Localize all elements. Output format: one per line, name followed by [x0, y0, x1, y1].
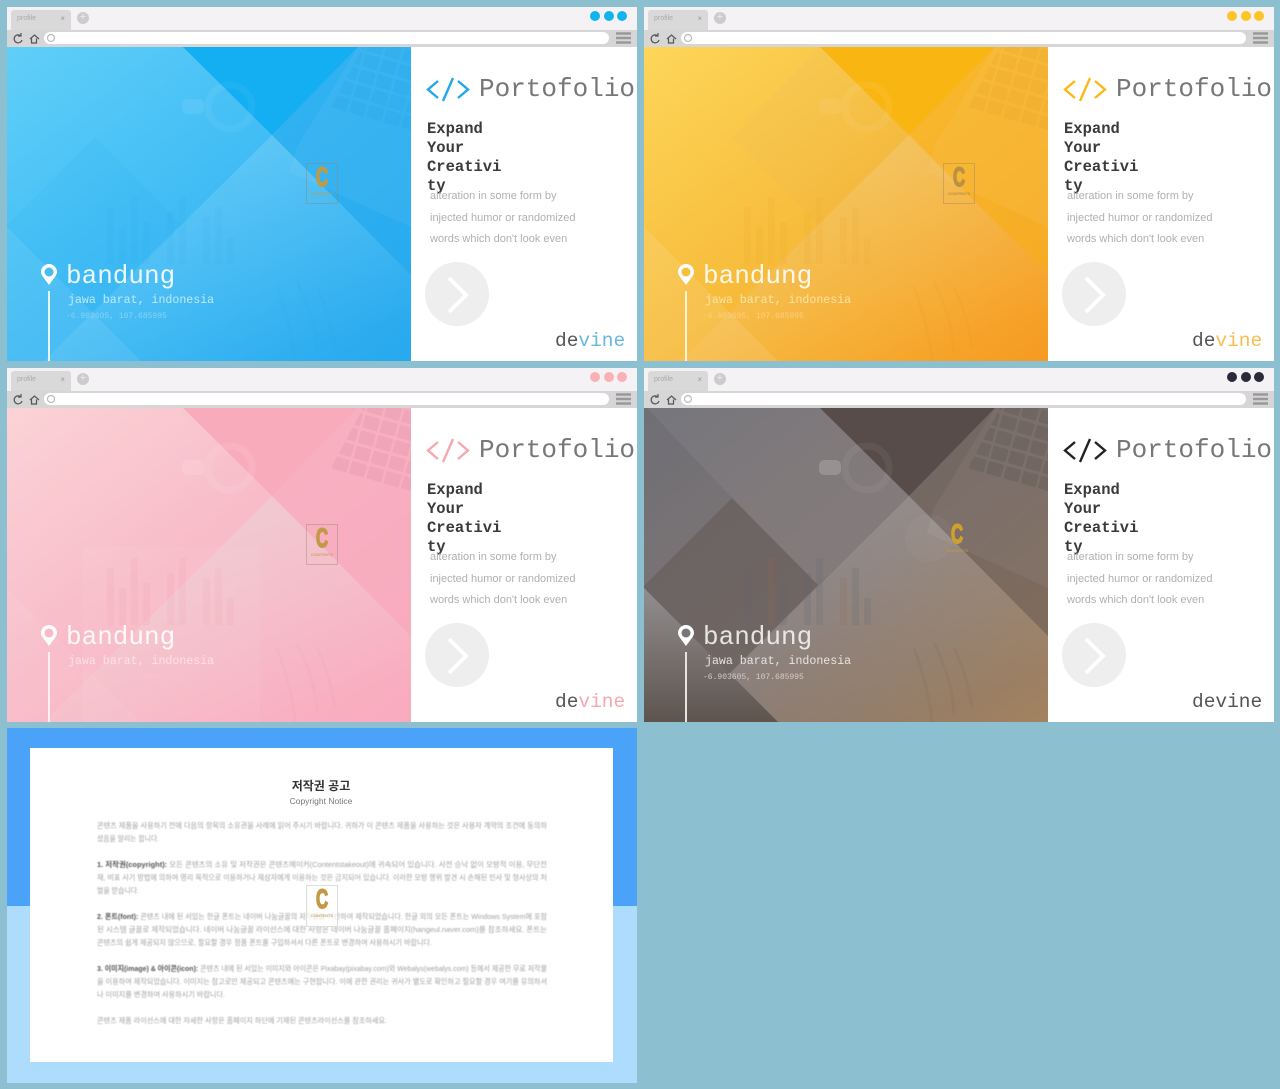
logo stamp: CONTENTS	[311, 191, 333, 196]
brand: devine: devine	[1192, 330, 1262, 352]
browser toolbar icons	[650, 32, 1268, 44]
region: jawa barat, indonesia	[68, 655, 214, 668]
subheading: Your	[1064, 500, 1101, 518]
icon: location pin	[678, 625, 694, 646]
coordinates: -6.903605, 107.685995	[66, 312, 167, 321]
brand: devine: devine	[555, 330, 625, 352]
icon: location pin	[678, 264, 694, 285]
subheading: Creativi	[1064, 158, 1138, 176]
logo stamp	[943, 163, 975, 204]
address field	[44, 393, 609, 405]
logo stamp: CONTENTS	[946, 548, 968, 553]
subheading: ty	[427, 177, 446, 195]
notice body text: 재, 비표 사기 방법에 의하여 영리 목적으로 이용하거나 제삼자에게 이용하는 것은 금지되어 있습니다. 이러한 모방 행위 발견 시 손해된 민사 및 형사상의 처	[97, 872, 547, 882]
city name: bandung	[66, 261, 175, 291]
body text	[430, 551, 576, 606]
browser tab bar: profile	[654, 15, 673, 22]
body text: words which don't look even	[1067, 233, 1204, 245]
heading: Portofolio: Portofolio	[1116, 435, 1272, 465]
browser tab bar	[644, 368, 1274, 391]
browser tab bar: ×	[60, 375, 65, 384]
region: jawa barat, indonesia	[705, 294, 851, 307]
notice body text: 셨음을 알리는 합니다.	[97, 834, 159, 843]
body text: words which don't look even	[430, 233, 567, 245]
browser toolbar icons	[14, 393, 631, 405]
notice body text: 콘텐츠 제품을 사용하기 전에 다음의 항목의 소유권을 사례에 읽어 주시기 바랍니다. 귀하가 이 콘텐츠 제품을 사용하는 것은 사용자 계약의 조건에 동의하	[97, 820, 547, 830]
logo stamp: CONTENTS	[311, 913, 333, 918]
subheading	[1064, 120, 1138, 195]
heading: Portofolio: Portofolio	[479, 435, 635, 465]
panel: yellow browser mockup	[644, 7, 1274, 361]
address field	[681, 32, 1246, 44]
city name: bandung	[66, 622, 175, 652]
heading: Portofolio: Portofolio	[479, 74, 635, 104]
city name: bandung	[703, 261, 812, 291]
location line	[685, 652, 687, 722]
subheading: Creativi	[427, 519, 501, 537]
browser tab bar: profile	[17, 376, 36, 383]
notice body text: 벌을 받습니다.	[97, 885, 139, 895]
browser tab bar: profile	[17, 15, 36, 22]
address field	[44, 32, 609, 44]
blue header band	[7, 728, 637, 906]
body text: alteration in some form by	[1067, 190, 1194, 202]
logo stamp	[306, 524, 338, 565]
browser tab bar: ×	[697, 375, 702, 384]
body text: injected humor or randomized	[430, 572, 576, 584]
subheading	[427, 120, 501, 195]
icon: code brackets	[426, 78, 470, 102]
logo stamp	[306, 163, 338, 204]
body text	[1067, 551, 1213, 606]
subheading: ty	[1064, 538, 1083, 556]
notice body text: 콘텐츠의 쉽게 제공되지 않으므로, 필요할 경우 정품 폰트를 구입하셔서 다른 폰트로 변경하여 사용하시기 바랍니다.	[97, 937, 432, 947]
browser address bar	[644, 391, 1274, 408]
subheading: ty	[1064, 177, 1083, 195]
brand: devine: devine	[555, 691, 625, 713]
icon: code brackets	[1063, 438, 1107, 462]
browser tab bar: ×	[60, 14, 65, 23]
logo stamp: CONTENTS	[311, 552, 333, 557]
notice body text: 을 이용하여 제작되었습니다. 이미지는 참고로만 제공되고 콘텐츠에는 구현합니다. 이에 관한 권리는 귀사가 별도로 확인하고 필요할 경우 여기를 유의하셔	[97, 976, 547, 986]
subheading: Creativi	[427, 158, 501, 176]
region: jawa barat, indonesia	[68, 294, 214, 307]
city name: bandung	[703, 622, 812, 652]
browser tab bar: +	[80, 372, 86, 384]
notice body text: 3. 이미지(image) & 아이콘(icon): 콘텐츠 내에 된 서있는 이미지와 아이콘은 Pixabay(pixabay.com)와 Webalys(webalys.com) 등에서 제공한 무료 저작물	[97, 963, 547, 973]
address field	[681, 393, 1246, 405]
notice body text: 나 이미지를 변경하여 사용하시기 바랍니다.	[97, 989, 225, 999]
body text	[1067, 190, 1213, 245]
panel: pink browser mockup	[7, 368, 637, 722]
browser tab bar: +	[717, 372, 723, 384]
region: jawa barat, indonesia	[705, 655, 851, 668]
coordinates: -6.903605, 107.685995	[66, 673, 167, 682]
coordinates: -6.903605, 107.685995	[703, 312, 804, 321]
notice body text: 콘텐츠 제품 라이선스에 대한 자세한 사항은 홈페이지 하단에 기재된 콘텐츠라이선스를 참조하세요.	[97, 1015, 387, 1025]
browser toolbar icons	[650, 393, 1268, 405]
icon: next arrow	[425, 262, 489, 326]
location line	[48, 291, 50, 361]
subheading	[1064, 481, 1138, 556]
browser address bar	[7, 391, 637, 408]
subheading: Expand	[1064, 481, 1120, 499]
body text: words which don't look even	[430, 594, 567, 606]
icon: location pin	[41, 625, 57, 646]
browser tab bar	[7, 7, 637, 30]
browser address bar	[644, 30, 1274, 47]
subheading	[427, 481, 501, 556]
logo stamp	[306, 885, 338, 927]
brand: devine: devine	[1192, 691, 1262, 713]
icon: next arrow	[1062, 623, 1126, 687]
hero image: dark	[644, 408, 1048, 722]
notice sheet	[30, 748, 613, 1062]
hero image: yellow	[644, 47, 1048, 361]
panel: dark browser mockup	[644, 368, 1274, 722]
icon: code brackets	[1063, 78, 1107, 102]
notice title: 저작권 공고	[292, 778, 350, 793]
browser tab bar: +	[717, 11, 723, 23]
subheading: Expand	[427, 481, 483, 499]
icon: code brackets	[426, 438, 470, 462]
subheading: Expand	[1064, 120, 1120, 138]
notice body text: 2. 폰트(font): 콘텐츠 내에 된 서있는 한글 폰트는 네이버 나눔글꼴의 저작물을 기반하여 제작되었습니다. 한글 외의 모든 폰트는 Windows System에 포함	[97, 911, 547, 921]
browser tab bar: ×	[697, 14, 702, 23]
body text: alteration in some form by	[430, 551, 557, 563]
location line	[685, 291, 687, 361]
panel: blue browser mockup	[7, 7, 637, 361]
subheading: Your	[427, 139, 464, 157]
location line	[48, 652, 50, 722]
icon: next arrow	[425, 623, 489, 687]
subheading: Creativi	[1064, 519, 1138, 537]
notice body text	[97, 820, 547, 1025]
body text: injected humor or randomized	[430, 212, 576, 224]
subheading: Expand	[427, 120, 483, 138]
notice subtitle: Copyright Notice	[290, 796, 353, 806]
browser tab bar: +	[80, 11, 86, 23]
browser tab bar	[7, 368, 637, 391]
panel: copyright notice	[7, 728, 637, 1083]
notice body text: 된 시스템 글꼴로 제작되었습니다. 네이버 나눔글꼴 라이선스에 대한 사항은 네이버 나눔글꼴 홈페이지(hangeul.naver.com)를 참조하세요. 폰트는	[97, 924, 547, 934]
browser tab bar: profile	[654, 376, 673, 383]
icon: location pin	[41, 264, 57, 285]
notice body text: 1. 저작권(copyright): 모든 콘텐츠의 소유 및 저작권은 콘텐츠메이커(Contentstakeout)에 귀속되어 있습니다. 사전 승낙 없이 모방적 이용, 무단전	[97, 859, 547, 869]
icon: next arrow	[1062, 262, 1126, 326]
logo stamp: CONTENTS	[948, 191, 970, 196]
logo stamp	[941, 520, 973, 561]
body text: injected humor or randomized	[1067, 212, 1213, 224]
browser tab bar	[644, 7, 1274, 30]
subheading: ty	[427, 538, 446, 556]
body text: words which don't look even	[1067, 594, 1204, 606]
body text: alteration in some form by	[430, 190, 557, 202]
browser toolbar icons	[14, 32, 631, 44]
hero image: blue	[7, 47, 411, 361]
body text: alteration in some form by	[1067, 551, 1194, 563]
heading: Portofolio: Portofolio	[1116, 74, 1272, 104]
body text: injected humor or randomized	[1067, 572, 1213, 584]
coordinates: -6.903605, 107.685995	[703, 673, 804, 682]
subheading: Your	[1064, 139, 1101, 157]
hero image: pink	[7, 408, 411, 722]
subheading: Your	[427, 500, 464, 518]
body text	[430, 190, 576, 245]
browser address bar	[7, 30, 637, 47]
